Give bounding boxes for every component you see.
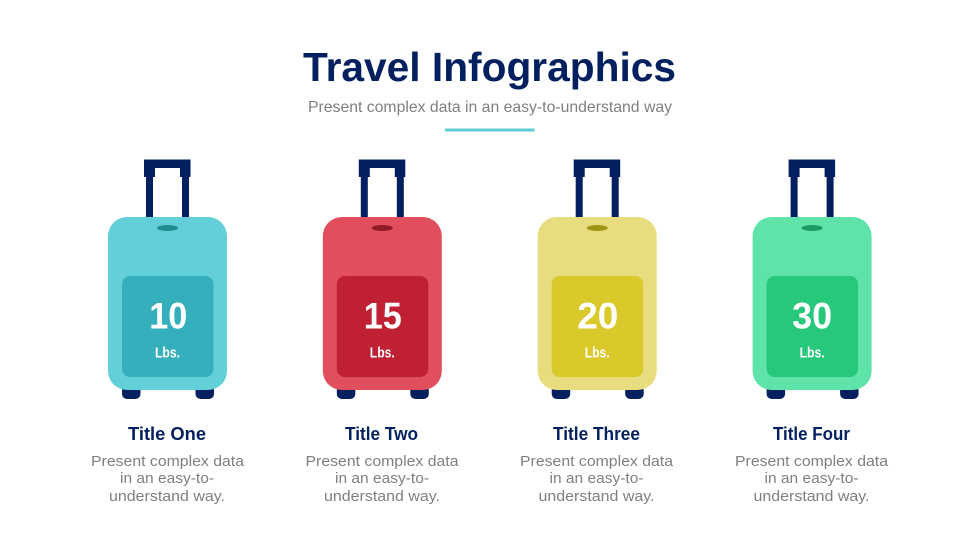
- text block: description two: in an easy-to-: [335, 470, 429, 487]
- heading: title four: Title Four: [773, 424, 850, 444]
- text block: description one: in an easy-to-: [120, 470, 214, 487]
- panel: title four: [735, 160, 889, 505]
- icon: red suitcase: [323, 160, 442, 399]
- value: 10 lbs: [149, 295, 187, 362]
- icon: teal suitcase: [108, 160, 227, 399]
- text block: description four: in an easy-to-: [764, 470, 858, 487]
- value: 30 lbs: [792, 295, 832, 362]
- panel: title three: [520, 160, 674, 505]
- text block: description two: [306, 453, 459, 505]
- value: 30 lbs: Lbs.: [800, 344, 825, 362]
- text block: description four: Present complex data: [735, 453, 889, 470]
- value: 30 lbs: 30: [792, 295, 832, 336]
- text block: description one: Present complex data: [91, 453, 245, 470]
- text block: description two: Present complex data: [306, 453, 459, 470]
- heading: title two: Title Two: [345, 424, 418, 444]
- value: 20 lbs: Lbs.: [585, 344, 610, 362]
- text block: description one: [91, 453, 245, 505]
- accent underline: [445, 128, 534, 132]
- title: Travel Infographics: [303, 44, 676, 90]
- icon: green suitcase: [753, 160, 872, 399]
- text block: description three: in an easy-to-: [550, 470, 644, 487]
- text block: description two: understand way.: [324, 488, 440, 505]
- value: 20 lbs: [577, 295, 618, 362]
- value: 15 lbs: [364, 295, 402, 362]
- value: 15 lbs: Lbs.: [370, 344, 395, 362]
- text block: description three: Present complex data: [520, 453, 674, 470]
- value: 20 lbs: 20: [577, 295, 618, 336]
- panel: title one: [91, 160, 245, 505]
- subtitle: Present complex data in an easy-to-understand way: [308, 99, 672, 116]
- icon: yellow suitcase: [538, 160, 657, 399]
- text block: description four: understand way.: [754, 488, 870, 505]
- text block: description three: understand way.: [538, 488, 654, 505]
- heading: title one: Title One: [128, 424, 206, 444]
- text block: description four: [735, 453, 889, 505]
- value: 10 lbs: 10: [149, 295, 187, 336]
- panel: title two: [306, 160, 459, 505]
- text block: description one: understand way.: [109, 488, 225, 505]
- heading: title three: Title Three: [553, 424, 640, 444]
- value: 10 lbs: Lbs.: [155, 344, 180, 362]
- value: 15 lbs: 15: [364, 295, 402, 336]
- text block: description three: [520, 453, 674, 505]
